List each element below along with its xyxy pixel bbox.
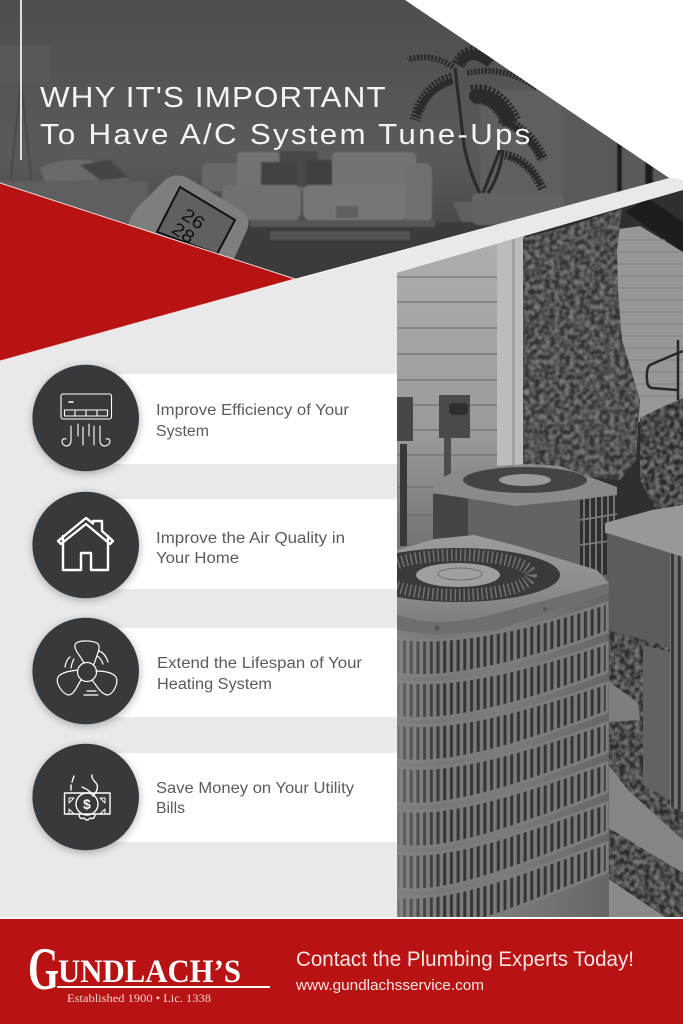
white column: [497, 235, 524, 470]
staircase: [625, 198, 683, 252]
circle shadow: [32, 366, 140, 474]
contact call to action: [295, 948, 634, 994]
label: [156, 780, 354, 817]
contact call to action: www.gundlachsservice.com: [295, 977, 484, 994]
right bush: [640, 398, 683, 510]
large condenser lid and fan: [397, 535, 609, 635]
label: [156, 530, 345, 567]
light grey content panel: [0, 177, 683, 917]
logo: Gundlach's: UNDLACH’S: [58, 954, 241, 990]
icon: potted palm plant: [408, 53, 543, 193]
accent vertical line: [20, 0, 22, 160]
title: To Have A/C System Tune-Ups: [40, 119, 530, 151]
label: Save Money on Your Utility: [156, 780, 354, 797]
list item 3: lifespan: [32, 618, 397, 727]
title: WHY IT'S IMPORTANT: [40, 82, 386, 114]
concrete pads: [607, 680, 683, 917]
label: [157, 655, 362, 693]
label: Extend the Lifespan of Your: [157, 655, 362, 672]
photo: living room with thermostat: [0, 0, 683, 282]
circle shadow: [32, 619, 140, 727]
icon: air conditioner: [61, 394, 112, 446]
title: [40, 82, 530, 151]
label: Your Home: [156, 550, 239, 567]
photo: outdoor A/C condenser units: [397, 190, 683, 917]
circle shadow: [32, 745, 140, 853]
icon circle: [32, 492, 139, 598]
white bar: [85, 753, 397, 842]
label: Improve the Air Quality in: [156, 530, 345, 547]
white bar: [85, 374, 397, 464]
label: System: [156, 423, 209, 440]
icon: digital thermostat: 28: [168, 219, 198, 248]
icon: fan: [57, 641, 117, 695]
label: [156, 402, 349, 440]
list item 1: efficiency: [32, 365, 397, 474]
logo: Gundlach's: [28, 936, 270, 1005]
white bar: [85, 628, 397, 717]
red triangle accent: [0, 183, 295, 361]
contact call to action: Contact the Plumbing Experts Today!: [296, 948, 634, 971]
evergreen shrub: [523, 208, 640, 480]
label: Heating System: [157, 676, 272, 693]
footer band: [0, 919, 683, 1024]
icon: digital thermostat: [128, 175, 248, 258]
dollar sign: $: [83, 796, 91, 812]
icon circle: [32, 365, 139, 471]
logo: Gundlach's: G: [28, 936, 59, 1002]
icon circle: [32, 744, 139, 850]
rear siding: [612, 226, 683, 422]
siding wall: [397, 240, 499, 560]
circle shadow: [32, 493, 140, 601]
icon: house: [58, 518, 113, 570]
logo: Gundlach's: Established 1900 • Lic. 1338: [67, 991, 211, 1005]
icon: digital thermostat: 26: [178, 205, 208, 234]
electrical boxes: [397, 395, 470, 546]
list item 2: air quality: [32, 492, 397, 601]
icon circle: [32, 618, 139, 724]
ground: mulch: [607, 630, 683, 917]
label: Bills: [156, 800, 185, 817]
white bar: [85, 499, 397, 589]
right condenser unit: [605, 505, 683, 812]
label: Improve Efficiency of Your: [156, 402, 349, 419]
list item 4: save money: [32, 744, 397, 853]
large condenser unit body with fins: [397, 590, 609, 933]
rear condenser unit: [433, 464, 617, 580]
icon: burning money: [64, 775, 110, 820]
stair railing: [647, 340, 683, 400]
